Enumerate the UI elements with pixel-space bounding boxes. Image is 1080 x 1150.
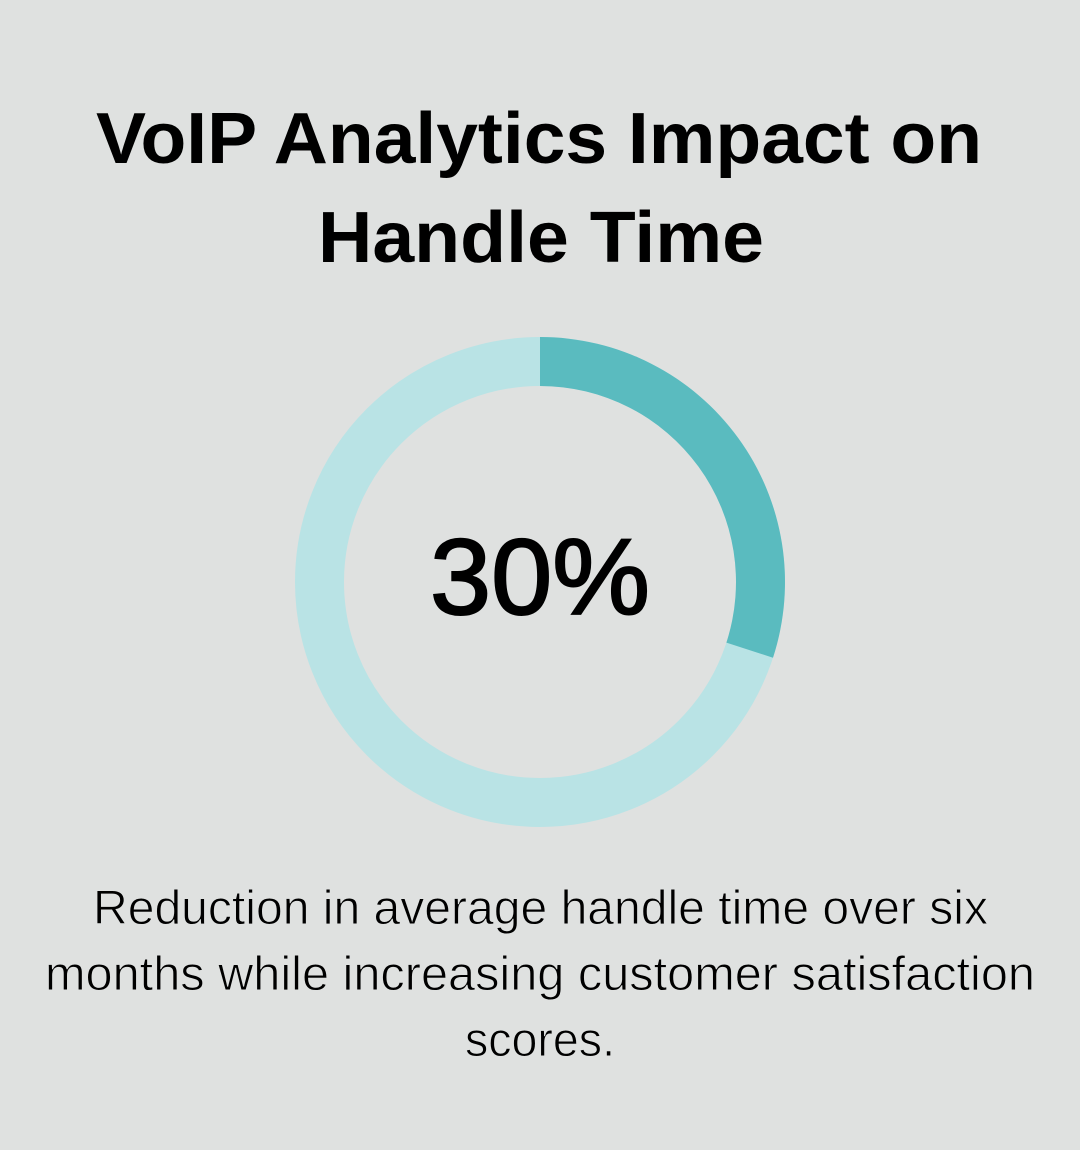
description text [45,882,1035,1067]
title: VoIP Analytics Impact on [96,99,982,179]
donut chart: 30% [320,337,785,802]
description text: months while increasing customer satisfaction [45,948,1035,1001]
description text: scores. [465,1014,615,1067]
description text: Reduction in average handle time over six [93,882,988,935]
title: Handle Time [318,198,764,278]
title [96,99,982,278]
donut track [320,362,760,802]
donut value arc [540,337,785,658]
donut value label: 30% [430,516,650,637]
